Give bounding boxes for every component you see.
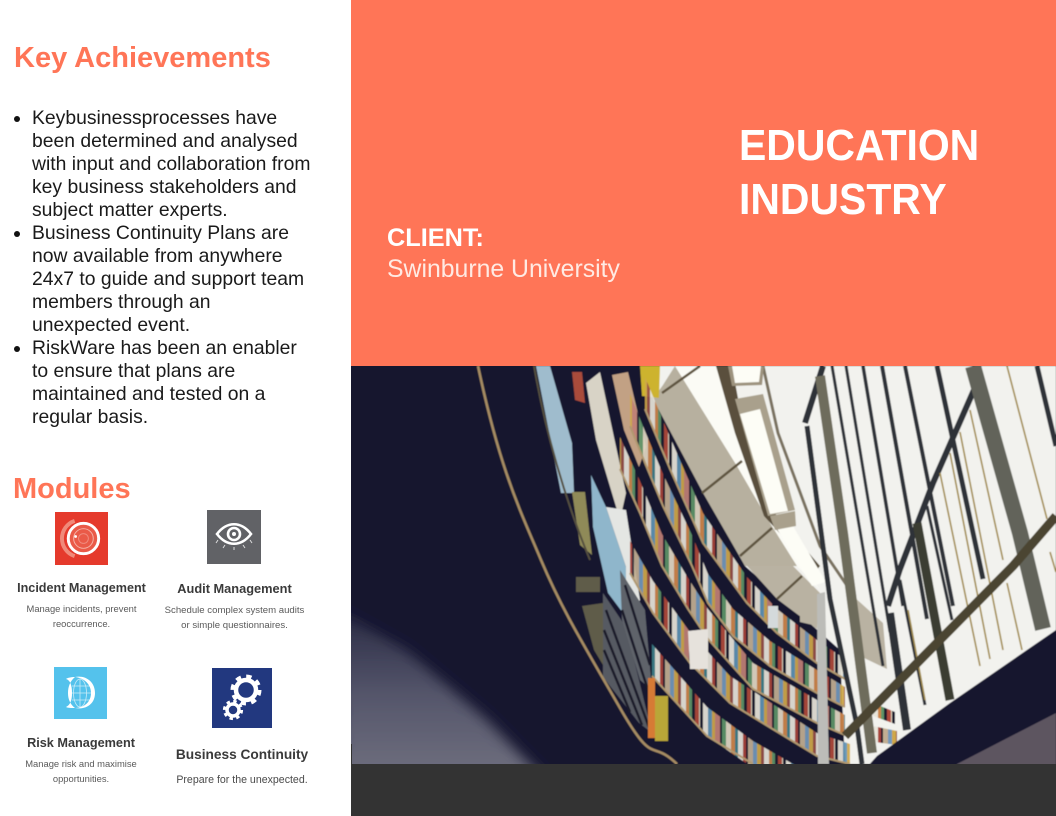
module title: Audit Management [177,581,292,596]
lower ceiling panels [747,566,887,669]
module title: Incident Management [17,581,146,595]
module description: Manage risk and maximise [25,758,137,769]
panel: header [351,0,1056,366]
achievements list: to ensure that plans are [32,360,235,382]
stacked gray books [603,593,652,733]
module title: Business Continuity [176,747,308,762]
module: business continuity [176,668,308,786]
wall [340,612,545,780]
bookshelf rows [620,377,850,768]
footer band [351,764,1056,816]
icon: gears [212,668,272,728]
photo: library bookshelves [351,366,1056,764]
yellow box [640,366,660,398]
window bars [805,366,1056,764]
module description: Schedule complex system audits [165,605,304,616]
lower balcony [868,630,1056,766]
title: INDUSTRY [739,175,947,224]
upper left books [536,366,574,493]
achievements list: maintained and tested on a [32,383,265,405]
achievements list: key business stakeholders and [32,176,297,198]
shelf row A [645,377,845,679]
struts [662,366,802,599]
achievements list: Keybusinessprocesses have [32,107,277,129]
achievements list: 24x7 to guide and support team [32,268,304,290]
heading: modules: Modules [13,473,131,505]
panel: left sidebar [0,0,351,816]
heading: key achievements: Key Achievements [14,42,271,74]
ladder [817,592,829,764]
title: EDUCATION [739,121,979,170]
title [739,121,979,224]
achievements list: Business Continuity Plans are [32,222,289,244]
achievements list: subject matter experts. [32,199,228,221]
module description: Prepare for the unexpected. [176,774,308,786]
client block [387,224,620,283]
module description: reoccurrence. [53,618,110,628]
module title: Risk Management [27,736,135,750]
achievements list: members through an [32,291,210,313]
client block: CLIENT: [387,224,484,252]
shelf row D [630,541,850,764]
achievements list [14,107,310,428]
achievements list: unexpected event. [32,314,190,336]
achievements list: regular basis. [32,406,148,428]
light fixtures [735,394,795,516]
module description: Manage incidents, prevent [27,603,136,614]
module description [25,758,137,784]
icon: eye [207,510,261,564]
ceiling beam [716,366,820,572]
shelf row C [620,437,845,735]
module: incident management [17,512,146,628]
shelf edges [620,409,850,764]
handrail [845,516,1056,736]
gray poles [820,376,872,753]
shelf row B [630,394,845,707]
module: audit management [165,510,304,631]
client block: Swinburne University [387,256,620,283]
icon: radar target [55,512,108,565]
shelf row E [652,644,800,768]
achievements list: now available from anywhere [32,245,283,267]
achievements list: been determined and analysed [32,130,298,152]
achievements list: RiskWare has been an enabler [32,337,297,359]
shelf details [688,629,708,669]
module description [165,605,304,631]
dark base [345,360,1056,770]
module description: opportunities. [53,772,109,784]
module description [27,603,136,628]
module: risk management [25,667,137,784]
white glare [675,366,820,590]
far bookshelf [873,703,895,724]
ceiling beige panel [653,366,797,566]
sidebar edge mark [351,744,352,816]
achievements list: with input and collaboration from [32,153,310,175]
module description: or simple questionnaires. [181,620,288,631]
ceiling and window [653,366,1056,764]
icon: globe [54,667,107,719]
outer rail [478,366,677,764]
